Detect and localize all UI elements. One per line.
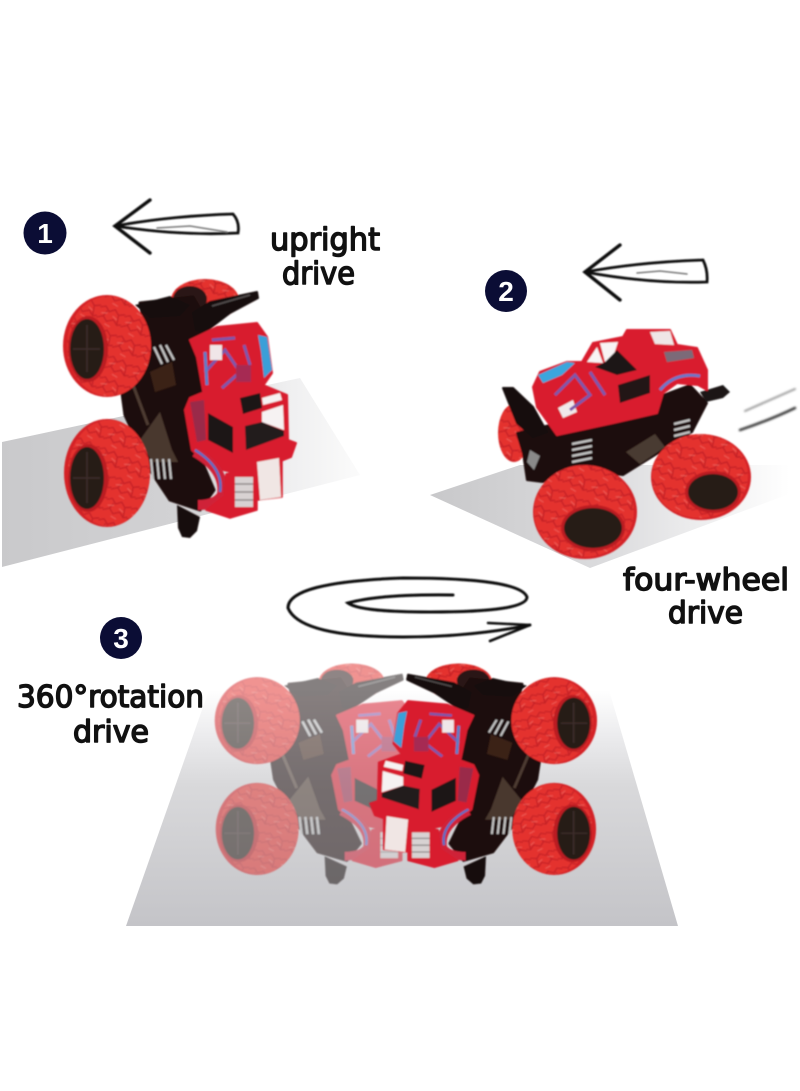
label: upright drive: drive bbox=[282, 256, 355, 292]
floor: upright drive bbox=[2, 378, 360, 567]
roll bar wing bbox=[503, 388, 547, 437]
arrow: upright direction bbox=[115, 200, 238, 253]
front left wheel bbox=[533, 465, 637, 559]
speed lines bbox=[740, 389, 795, 430]
label: 360 rotation drive: drive bbox=[73, 715, 149, 750]
label: 360 rotation drive: 360°rotation bbox=[17, 680, 204, 715]
badge: step 1: 1 bbox=[37, 218, 53, 249]
badge: step 2: 2 bbox=[498, 276, 514, 307]
badge: step 3 bbox=[100, 617, 142, 659]
car: upright drive bbox=[63, 279, 296, 538]
arrow: rotation swirl bbox=[288, 578, 530, 641]
rear wheel bbox=[498, 404, 530, 462]
label: four-wheel drive: drive bbox=[668, 596, 743, 631]
floor: rotation drive bbox=[126, 690, 678, 926]
badge: step 1 bbox=[24, 212, 66, 254]
car: four-wheel drive bbox=[498, 330, 751, 559]
chassis bbox=[517, 385, 707, 482]
label: four-wheel drive: four-wheel bbox=[623, 563, 789, 598]
label: 360 rotation drive bbox=[17, 680, 204, 750]
floor: four-wheel drive bbox=[430, 465, 800, 568]
arrow: four-wheel direction bbox=[585, 245, 707, 300]
label: four-wheel drive bbox=[623, 563, 789, 631]
label: upright drive: upright bbox=[270, 222, 380, 258]
car: rotation solid bbox=[370, 663, 597, 884]
car: rotation ghost bbox=[215, 663, 439, 884]
badge: step 2 bbox=[485, 270, 527, 312]
body bbox=[533, 330, 707, 435]
axle bbox=[700, 385, 730, 402]
front right wheel bbox=[651, 434, 751, 520]
badge: step 3: 3 bbox=[113, 623, 129, 654]
label: upright drive bbox=[270, 222, 380, 292]
